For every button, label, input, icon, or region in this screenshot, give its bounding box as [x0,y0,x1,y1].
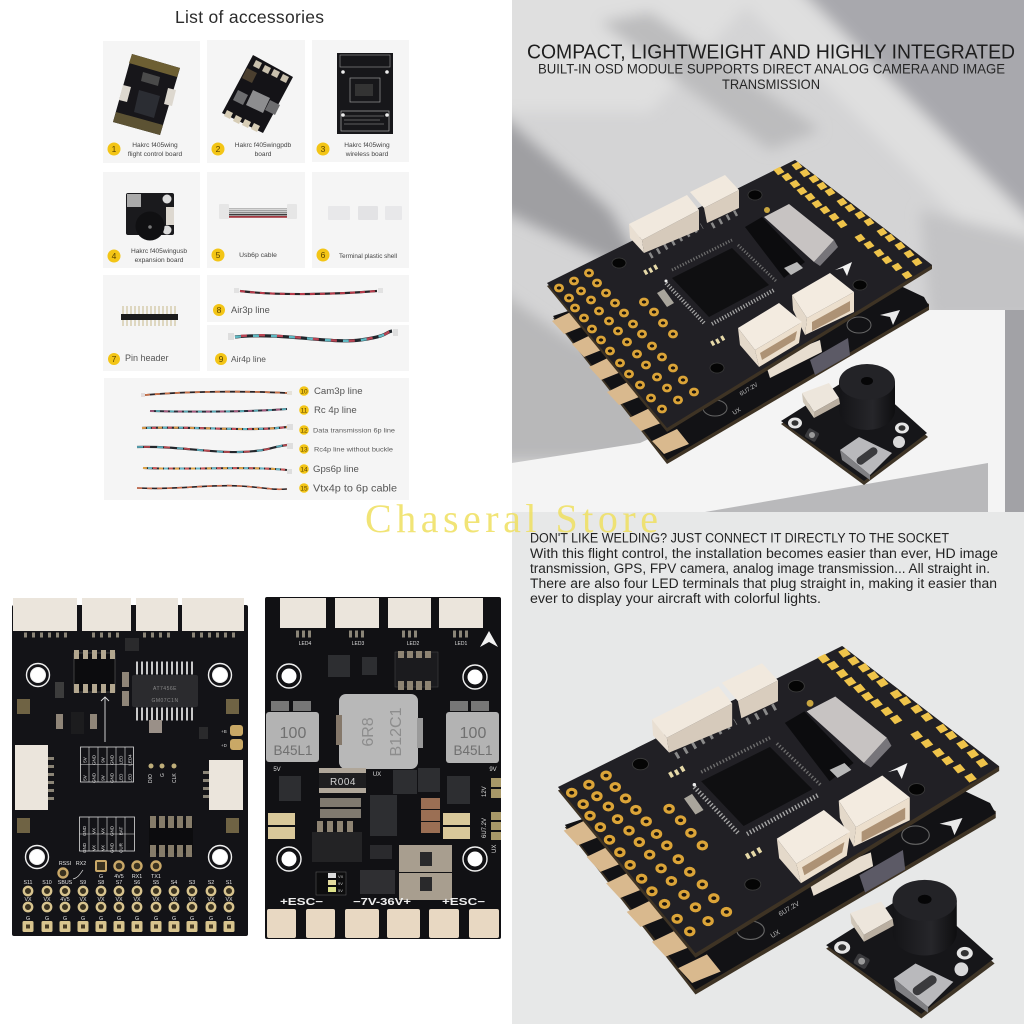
debug pads: DIO [148,774,154,783]
servo pad rows: S8 [98,880,104,886]
servo pad rows: G [117,916,121,922]
item 15: vtx4p to 6p cable: 15 [300,486,308,492]
led pin table: GND [110,772,114,783]
servo pad rows: G [209,916,213,922]
item 6: terminal plastic shell [316,206,402,262]
indicator leds: VX [338,874,344,879]
item 4: usb expansion board: Hakrc f405wingusb [131,248,187,255]
boot pads: +B [221,729,227,734]
led connectors: LED4 [299,641,311,647]
power pin table [80,817,134,853]
description text: DON'T LIKE WELDING? JUST CONNECT IT DIRECTLY TO THE SOCKET [530,530,949,546]
upper pin header [74,650,115,742]
debug pads: CLK [172,773,178,783]
item 4: usb expansion board: expansion board [135,257,184,264]
serial pads and labels: RSSI [59,861,71,867]
item 2: power distribution board: board [255,151,272,158]
item 13: rc4p line without buckle [137,443,394,454]
servo pad rows: VX [24,897,32,903]
flight control board [547,160,932,432]
lower pin header [149,816,193,857]
osd chip: AT7456E [153,686,177,692]
photo background [490,0,1024,512]
board body [12,605,248,936]
description text: With this flight control, the installation becomes easier than ever, HD image [530,546,998,561]
small chips [279,655,470,894]
servo pad rows: S4 [171,880,177,886]
led connectors [280,598,483,647]
servo pad rows [22,880,234,932]
servo pad rows: G [99,916,103,922]
power pin table: BAT [118,827,124,835]
led pin table: GND [110,754,114,765]
servo pad rows: VX [207,897,215,903]
power labels: −7V-36V+ [353,897,411,908]
item 14: gps6p line [143,464,359,475]
power labels: +ESC− [442,897,485,908]
power pin table: VX [100,845,106,851]
description text: There are also four LED terminals that plug straight in, making it easier than [530,576,997,591]
power labels [280,897,485,908]
panel: direct socket connection [512,512,1024,1024]
status leds [643,264,725,346]
indicator leds: 9V [338,881,343,886]
item 14: gps6p line: Gps6p line [313,464,359,475]
servo pad rows: VX [43,897,51,903]
item 12: data transmission 6p line: Data transmission 6p line [313,428,396,434]
item 10: cam3p line [141,386,363,397]
left inductor: 5V [273,767,281,773]
white table surface [512,310,1005,512]
item 9: air4p line [215,329,398,365]
item 15: vtx4p to 6p cable [137,483,397,494]
six-pin socket [802,383,840,418]
left inductor [266,712,319,773]
led connectors: LED1 [455,641,467,647]
servo pad rows: S11 [23,880,33,886]
osd chip: GM07C1N [151,698,179,704]
osd chip [132,668,198,714]
debug pads [148,764,178,783]
servo pad rows: S2 [208,880,214,886]
component stack repeat [558,646,999,1019]
servo pad rows: S7 [116,880,122,886]
side pads: UX [492,845,498,853]
serial pads and labels: 4V5 [114,874,124,880]
subheading: built-in osd module: BUILT-IN OSD MODULE SUPPORTS DIRECT ANALOG CAMERA AND IMAGE [538,60,1005,76]
item 2: power distribution board: 2 [216,144,221,154]
servo pad rows: VX [225,897,233,903]
large inductor [336,694,423,769]
power pin table: VX [92,828,96,834]
debug pads: G [160,773,166,777]
lower pin header [312,821,362,862]
servo pad rows: VX [170,897,178,903]
item 13: rc4p line without buckle: 13 [300,446,308,454]
boot pads: +D [221,743,228,748]
servo pad rows: G [190,916,194,922]
sensors [17,699,239,833]
led connectors: LED3 [352,641,364,647]
led pin table: 9V [100,775,106,781]
mounting holes [612,190,867,373]
led pin table [80,747,134,783]
indicator leds [316,872,346,895]
large inductor: 6R8 [360,717,377,747]
led pin table: GND [92,754,96,765]
power pin table: VX [100,828,106,834]
servo pad rows: G [135,916,139,922]
indicator leds: 5V [338,888,343,893]
item 4: usb expansion board: 4 [112,251,117,261]
servo pad rows: VX [79,897,87,903]
usb buzzer module [781,364,928,485]
servo pad rows: G [172,916,176,922]
item 6: terminal plastic shell: Terminal plastic shell [339,253,397,260]
right inductor [446,712,499,773]
item 1: flight control board: flight control board [128,151,182,158]
item 8: air3p line: 8 [217,305,222,315]
led pin table: LED4 [128,754,132,766]
large inductor: B12C1 [388,707,405,756]
servo pad rows: VX [115,897,123,903]
serial pads and labels: G [99,874,103,880]
component stack [547,160,932,485]
servo pad rows: VX [152,897,160,903]
led pin table: LED [128,773,132,782]
main processor chip [657,240,777,324]
item 8: air3p line: Air3p line [231,305,270,315]
power pin table: VX [92,845,96,851]
power labels: +ESC− [280,897,323,908]
lower board [552,236,929,464]
top connectors [13,598,244,635]
small components [55,638,208,739]
mounting holes [277,664,487,871]
item 2: power distribution board [212,55,293,158]
panel: flight controller underside [12,598,248,936]
item 5: usb6p cable: 5 [216,250,221,260]
item 15: vtx4p to 6p cable: Vtx4p to 6p cable [313,484,397,494]
right inductor: 9V [489,767,497,773]
led pin header [395,651,438,690]
led connectors: LED2 [407,641,419,647]
serial pads and labels: TX1 [151,874,161,880]
servo pad rows: S10 [42,880,52,886]
led pin table: GND [92,772,96,783]
servo pad rows: G [63,916,67,922]
serial pads and labels: RX1 [132,874,142,880]
item 12: data transmission 6p line [142,424,396,435]
subheading: transmission: TRANSMISSION [722,76,820,92]
side pads: 12V [482,786,488,797]
servo pad rows: G [227,916,231,922]
heading: list of accessories: List of accessories [175,7,324,27]
servo pad rows: VX [188,897,196,903]
item 8: air3p line [213,288,383,316]
led pin table: 5V [82,775,88,781]
power pin table: GND [82,825,87,836]
lower board: UX [732,407,742,417]
item 7: pin header: Pin header [125,353,169,363]
item 3: wireless board: Hakrc f405wing [344,142,390,149]
item 3: wireless board: wireless board [345,151,389,158]
servo pad rows: VX [97,897,105,903]
servo pad rows: G [45,916,49,922]
servo pad rows: G [26,916,30,922]
side pads [482,778,501,853]
item 5: usb6p cable [212,204,297,262]
servo pad rows: G [81,916,85,922]
description text: transmission, GPS, FPV camera, analog image transmission... All straight in. [530,561,990,576]
description text [530,530,998,606]
item 14: gps6p line: 14 [300,466,308,474]
item 13: rc4p line without buckle: Rc4p line without buckle [314,446,394,454]
micro usb socket [745,204,852,278]
servo pad rows: G [154,916,158,922]
mounting holes [26,664,232,868]
servo pad rows: VX [133,897,141,903]
panel: list of accessories [103,7,409,500]
power pin table: GND [82,842,87,853]
direction arrow [480,631,498,647]
power pads [267,909,499,938]
item 11: rc 4p line: Rc 4p line [314,405,357,416]
item 7: pin header: 7 [112,354,117,364]
servo pad rows: S6 [134,880,140,886]
panel: compact and lightweight photo [490,0,1024,512]
item 12: data transmission 6p line: 12 [300,428,308,434]
buzzer cylinder [839,364,895,430]
power pin table: GND [110,842,114,853]
serial pads and labels [58,861,161,880]
gold through-hole rings [555,270,698,412]
left inductor: 100 [280,725,306,742]
usb-c socket [840,437,892,480]
board body [265,597,501,939]
push button and led [804,428,905,448]
item 11: rc 4p line: 11 [301,408,308,414]
item 6: terminal plastic shell: 6 [321,250,326,260]
power pin table: GND [110,825,114,836]
current sense resistor [319,768,381,793]
power pin table: CUR [118,842,124,853]
servo pad rows: 4V5 [60,897,70,903]
item 9: air4p line: Air4p line [231,354,266,364]
servo pad rows: S1 [226,880,232,886]
led pin table: 9V [100,757,106,763]
led pin table: 5V [82,757,88,763]
item 3: wireless board: 3 [321,144,326,154]
watermark: Chaseral Store [365,496,658,541]
current sense resistor: UX [373,772,381,778]
side pads: 6U7.2V [482,818,488,838]
item 7: pin header [108,306,178,365]
servo pad rows: S9 [80,880,86,886]
gold solder pads [774,162,922,279]
description text: ever to display your aircraft with colorful lights. [530,591,821,606]
item 4: usb expansion board [108,193,187,264]
item 5: usb6p cable: Usb6p cable [239,252,277,259]
boot pads [221,725,243,750]
item 2: power distribution board: Hakrc f405wingpdb [235,142,292,149]
right inductor: 100 [460,725,486,742]
item 3: wireless board [316,53,393,158]
item 1: flight control board [108,54,182,158]
item 1: flight control board: Hakrc f405wing [132,142,178,149]
panel: power distribution board [265,597,501,939]
led pin table: LED [118,773,124,782]
servo pad rows: S5 [153,880,159,886]
servo pad rows: S3 [189,880,195,886]
left inductor: B45L1 [273,743,313,758]
serial pads and labels: RX2 [76,861,86,867]
item 11: rc 4p line [150,405,357,416]
capacitors [268,701,489,839]
item 1: flight control board: 1 [112,144,117,154]
servo pad rows: SBUS [58,880,73,886]
item 10: cam3p line: 10 [300,388,308,396]
item 9: air4p line: 9 [219,354,224,364]
lower board: 6U7.2V [739,382,759,398]
accessory cards [103,40,409,500]
current sense resistor: R004 [330,777,356,788]
led pin table: LED [118,755,124,764]
item 10: cam3p line: Cam3p line [314,386,363,397]
side connectors [15,745,243,810]
output inductors [399,845,452,900]
white connectors [629,175,854,367]
right inductor: B45L1 [453,743,493,758]
